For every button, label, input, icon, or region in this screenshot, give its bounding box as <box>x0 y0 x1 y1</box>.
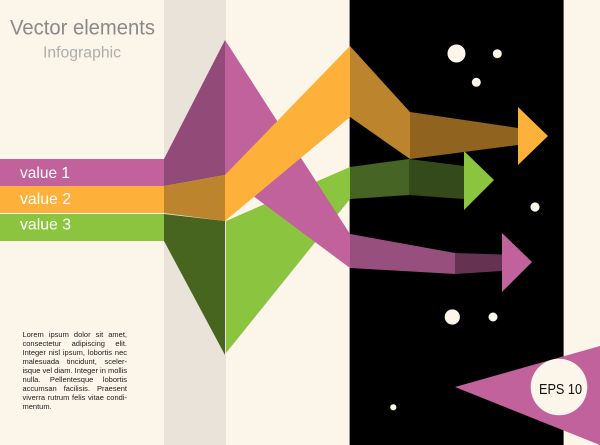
ribbon: value 1 pink <box>0 40 532 292</box>
text block: lorem ipsum: mentum. <box>22 402 52 410</box>
label: value 3: value 3 <box>20 216 71 234</box>
panel: black column <box>350 0 564 445</box>
badge: EPS 10 <box>455 346 600 445</box>
title: Vector elements <box>10 16 155 40</box>
column: shaded band <box>164 0 226 445</box>
ribbon: value 2 orange <box>0 46 548 221</box>
label: value 1: value 1 <box>20 165 70 182</box>
text block: lorem ipsum <box>22 330 127 410</box>
text block: lorem ipsum: Lorem ipsum dolor sit amet, <box>22 330 127 338</box>
badge: EPS 10: EPS 10 <box>539 382 582 398</box>
text block: lorem ipsum: accumsan facilisis. Praesent <box>22 384 127 392</box>
text block: lorem ipsum: nulla. Pellentesque lobortis <box>22 374 127 384</box>
label: value 2: value 2 <box>20 191 71 208</box>
ribbon: value 3 green <box>0 151 494 355</box>
text block: lorem ipsum: malesuada tincidunt, sceler- <box>22 356 127 366</box>
text block: lorem ipsum: viverra rutrum felis vitae condi- <box>22 392 127 402</box>
text block: lorem ipsum: isque vel diam. Integer in mollis <box>22 366 127 374</box>
dots <box>390 44 540 410</box>
subtitle: Infographic <box>43 44 121 62</box>
text block: lorem ipsum: Integer nisl ipsum, lobortis nec <box>22 348 127 356</box>
text block: lorem ipsum: consectetur adipiscing elit. <box>22 338 127 348</box>
